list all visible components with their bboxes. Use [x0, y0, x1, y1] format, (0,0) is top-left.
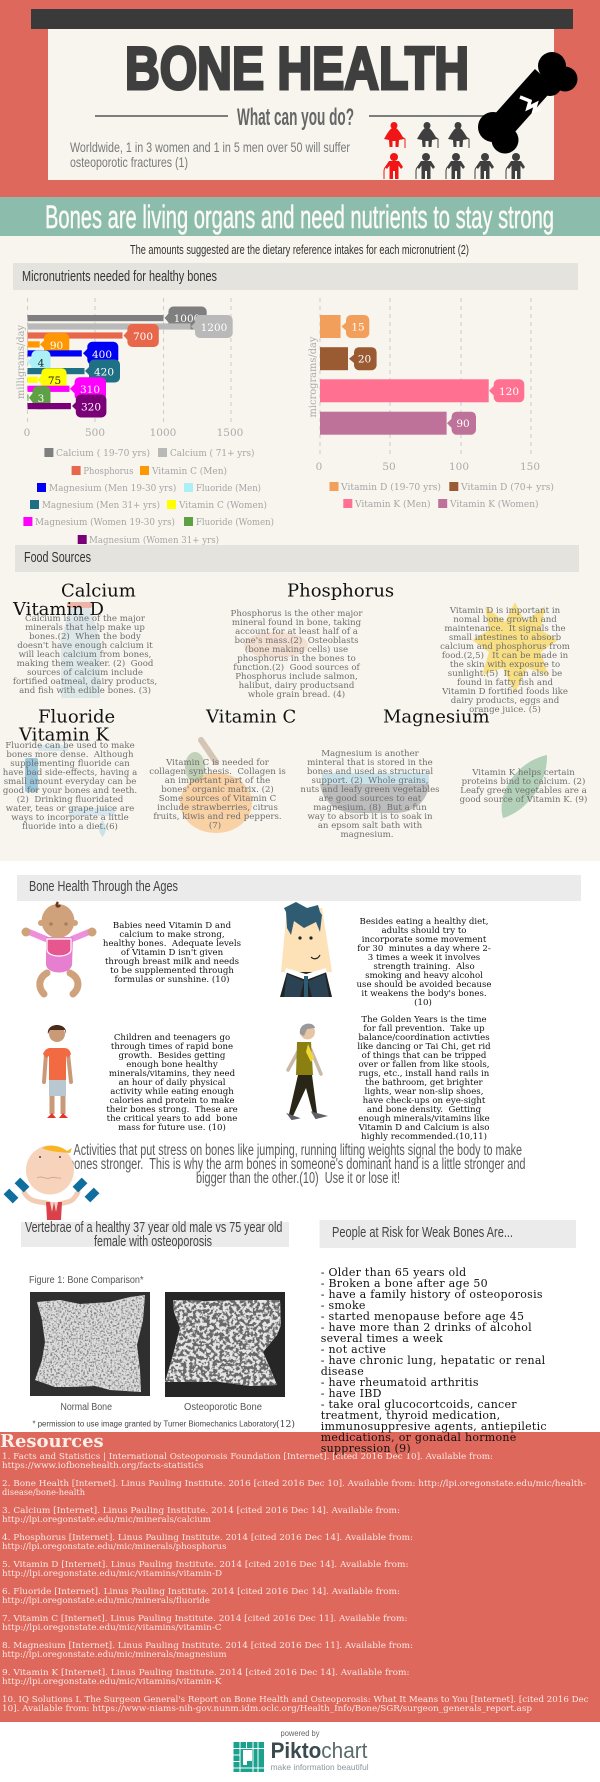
- axis ticks: 0: [316, 461, 322, 473]
- text: to be supplemented through: [110, 966, 234, 976]
- heading: people at risk: People at Risk for Weak Bones Are...: [332, 1224, 513, 1241]
- reference list: https://www.iofbonehealth.org/facts-statistics: [2, 1461, 203, 1471]
- risk factor list: - smoke: [321, 1299, 366, 1312]
- icon: fish: [244, 632, 308, 658]
- reference list: http://lpi.oregonstate.edu/mic/minerals/calcium: [2, 1515, 211, 1525]
- reference list: http://lpi.oregonstate.edu/mic/minerals/phosphorus: [2, 1542, 226, 1552]
- legend: Calcium ( 71+ yrs): [170, 448, 254, 459]
- axis ticks: [24, 427, 243, 439]
- risk factor list: - take oral glucocortcoids, cancer: [321, 1398, 517, 1411]
- panel: fluoride: [3, 707, 137, 837]
- text: the bathroom, get brighter: [365, 1078, 484, 1088]
- text: whole grain bread. (4): [248, 689, 345, 700]
- text: it weakens the body's bones.: [361, 989, 487, 999]
- text: small amount everyday can be: [4, 777, 136, 787]
- subtitle: What can you do?: [237, 104, 354, 131]
- risk factor list: treatment, thyroid medication,: [321, 1409, 500, 1422]
- text: doesn't have enough calcium it: [17, 641, 153, 651]
- risk factor list: [321, 1266, 547, 1455]
- axis title: milligrams/day: [16, 325, 27, 399]
- reference list: http://lpi.oregonstate.edu/mic/minerals/magnesium: [2, 1650, 226, 1660]
- icon: men: [384, 153, 525, 179]
- text: adults should try to: [382, 926, 466, 936]
- text: highly recommended.(10,11): [361, 1131, 487, 1142]
- text: magnesium. (8) But a fun: [313, 802, 427, 813]
- text: [356, 917, 492, 1008]
- heading: micronutrients: [13, 263, 578, 290]
- panel: resources: [0, 1431, 600, 1722]
- text: [106, 1033, 238, 1133]
- reference list: 8. Magnesium [Internet]. Linus Pauling Institute. 2014 [cited 2016 Dec 11]. Available from:: [2, 1641, 413, 1651]
- bar: calcium 71+: 1200: [201, 322, 227, 334]
- intro note: The amounts suggested are the dietary reference intakes for each micronutrient (2): [130, 243, 469, 257]
- footer: piktochart logo: [234, 1729, 369, 1772]
- reference list: http://lpi.oregonstate.edu/mic/vitamins/vitamin-C: [2, 1623, 222, 1633]
- axis ticks: 100: [449, 461, 469, 473]
- text: good source of Vitamin K. (9): [460, 794, 587, 805]
- text: phosphorus in the bones to: [237, 654, 356, 664]
- figure title: Figure 1: Bone Comparison*: [29, 1275, 144, 1286]
- text: rugs, etc., install hand rails in: [359, 1069, 490, 1079]
- text: minerals that help make up: [25, 623, 145, 633]
- text: found in fatty fish and: [457, 678, 554, 688]
- text: Some sources of Vitamin C: [159, 794, 277, 804]
- text: dairy products, eggs and: [451, 696, 560, 706]
- axis ticks: 1500: [217, 427, 243, 439]
- text: and bone density. Getting: [367, 1105, 482, 1115]
- icon: leaf: [502, 755, 547, 818]
- activity message: [68, 1142, 526, 1187]
- reference list: http://lpi.oregonstate.edu/mic/minerals/fluoride: [2, 1596, 210, 1606]
- heading: Magnesium: [383, 707, 490, 728]
- text: sources of calcium include: [27, 668, 143, 678]
- powered by: powered by: [280, 1729, 320, 1738]
- bar: vitamin K men: 120: [499, 386, 519, 398]
- text: an hour of daily physical: [118, 1078, 226, 1088]
- text: Vitamin K helps certain: [471, 768, 575, 778]
- text: bone's mass.(2) Osteoblasts: [234, 635, 359, 646]
- bar: vitamin C women: 75: [48, 375, 61, 387]
- panel: magnesium: [300, 707, 490, 840]
- bar: vitamin C men: [28, 333, 69, 356]
- reference list: 9. Vitamin K [Internet]. Linus Pauling Institute. 2014 [cited 2016 Dec 14]. Available from:: [2, 1668, 410, 1678]
- axis ticks: 500: [85, 427, 105, 439]
- text: an important part of the: [165, 776, 270, 786]
- icon: businessman: [280, 902, 332, 997]
- panel: babies: [22, 902, 241, 994]
- permission note: * permission to use image granted by Turner Biomechanics Laboratory: [32, 1420, 276, 1429]
- text: way to absorb it is to soak in: [307, 812, 433, 822]
- bar: vitamin D 19-70: 15: [351, 322, 365, 334]
- text: for fall prevention. Take up: [363, 1024, 485, 1034]
- reference list: 4. Phosphorus [Internet]. Linus Pauling Institute. 2014 [cited 2016 Dec 14]. Available from:: [2, 1533, 413, 1543]
- text: [3, 741, 137, 832]
- bar: magnesium men 19-30: 400: [92, 349, 112, 361]
- heading: bone health through the ages: Bone Health Through the Ages: [29, 878, 178, 895]
- legend: Calcium ( 19-70 yrs): [56, 448, 150, 459]
- fracture statistic: [70, 139, 350, 170]
- text: Calcium is one of the major: [25, 614, 146, 624]
- text: Magnesium is another: [321, 749, 420, 759]
- text: bones.(2) When the body: [29, 631, 141, 642]
- text: function.(2) Good sources of: [233, 662, 361, 673]
- tagline: make information beautiful: [271, 1762, 369, 1772]
- bar: magnesium men 19-30: [28, 342, 118, 365]
- text: Fluoride can be used to make: [5, 741, 135, 751]
- header panel: [31, 9, 578, 180]
- wordmark: Piktochart: [271, 1738, 367, 1763]
- bar: vitamin K women: [320, 412, 476, 435]
- legend: Magnesium (Men 31+ yrs): [42, 500, 160, 511]
- text: bones and used as structural: [307, 767, 433, 777]
- bar: magnesium men 31+: 420: [94, 366, 114, 378]
- heading: micronutrients: Micronutrients needed for healthy bones: [22, 268, 217, 285]
- text: supplementing fluoride can: [10, 759, 130, 769]
- text: Vitamin D fortified foods like: [441, 687, 568, 697]
- legend: Vitamin C (Men): [151, 466, 227, 477]
- heading: Calcium: [61, 581, 136, 602]
- risk factor list: disease: [321, 1365, 364, 1378]
- text: have bad side-effects, having a: [3, 768, 137, 778]
- heading: food sources: Food Sources: [24, 549, 91, 566]
- risk factor list: - Broken a bone after age 50: [321, 1277, 488, 1290]
- text: 3 times a week it involves: [368, 953, 480, 963]
- bar: calcium 71+: [28, 315, 233, 338]
- text: Babies need Vitamin D and: [113, 921, 232, 931]
- text: Phosphorus include salmon,: [235, 672, 358, 682]
- osteoporotic bone image: [165, 1292, 285, 1397]
- text: balance/coordination activties: [358, 1033, 490, 1043]
- text: (2) Drinking fluoridated: [17, 794, 124, 805]
- text: nuts and leafy green vegetables: [300, 785, 440, 795]
- chart: vitamins D and K, micrograms per day: [308, 298, 554, 510]
- text: mineral found in bone, taking: [232, 618, 362, 628]
- text: will leach calcium from bones,: [19, 650, 151, 660]
- panel: phosphorus: [231, 581, 394, 700]
- bar: fluoride men: [28, 350, 50, 374]
- text: sunlight.(5) It can also be: [448, 668, 562, 679]
- heading: food sources: [15, 545, 579, 572]
- icon: sun: [472, 602, 558, 693]
- heading: Vitamin K: [18, 725, 110, 746]
- risk factor list: - not active: [321, 1343, 386, 1356]
- fracture statistic: Worldwide, 1 in 3 women and 1 in 5 men over 50 will suffer: [70, 139, 350, 155]
- heading: Phosphorus: [287, 581, 394, 602]
- text: nomal bone growth and: [453, 615, 557, 625]
- text: through breast milk and needs: [105, 957, 239, 967]
- caption: normal: Normal Bone: [60, 1402, 112, 1413]
- risk factor list: medications, or gonadal hormone: [321, 1431, 516, 1444]
- axis ticks: 0: [24, 427, 30, 439]
- text: orange juice. (5): [469, 704, 541, 715]
- bar: vitamin K men: [320, 379, 524, 402]
- text: small intestines to absorb: [449, 633, 562, 643]
- reference list: 6. Fluoride [Internet]. Linus Pauling Institute. 2014 [cited 2016 Dec 14]. Available from:: [2, 1587, 400, 1597]
- bar: magnesium women 31+: 320: [81, 402, 101, 414]
- text: good for your bones and teeth.: [3, 786, 137, 796]
- legend: Vitamin K (Men): [354, 499, 430, 510]
- panel: golden years: [288, 1015, 491, 1142]
- bar: vitamin D 70+: [320, 347, 377, 370]
- heading: vertebrae comparison: Vertebrae of a healthy 37 year old male vs 75 year old: [25, 1219, 282, 1236]
- text: calories and protein to make: [109, 1096, 235, 1106]
- reference list: 10. IQ Solutions I. The Surgeon General's Report on Bone Health and Osteoporosis: What It Means to You [Internet]. [cited 2016 Dec: [2, 1695, 589, 1705]
- reference list: 1. Facts and Statistics | International Osteoporosis Foundation [Internet]. [cited 2016 Dec 10]. Available from:: [2, 1452, 493, 1462]
- heading: Fluoride: [38, 707, 115, 728]
- text: smoking and heavy alcohol: [365, 971, 483, 981]
- risk factor list: - have a family history of osteoporosis: [321, 1288, 543, 1301]
- text: of things that can be tripped: [362, 1051, 487, 1061]
- icon: tap and water: [25, 745, 115, 837]
- text: (bone making cells) use: [245, 644, 348, 655]
- reference list: disease/bone-health: [2, 1488, 85, 1498]
- text: minteral that is stored in the: [307, 758, 433, 768]
- axis ticks: 150: [520, 461, 540, 473]
- legend: Magnesium (Women 31+ yrs): [89, 535, 219, 546]
- text: healthy bones. Adequate levels: [103, 939, 241, 949]
- text: the critical years to add bone: [107, 1114, 237, 1124]
- risk factor list: - have chronic lung, hepatatic or renal: [321, 1354, 546, 1367]
- heading: people at risk: [320, 1220, 576, 1248]
- icon: broken bone: [478, 52, 578, 154]
- axis ticks: 50: [382, 461, 396, 473]
- text: bones' organic matrix. (2): [161, 784, 274, 795]
- axis title: micrograms/day: [308, 336, 319, 418]
- risk factor list: - have more than 2 drinks of alcohol: [321, 1321, 532, 1334]
- text: formulas or sunshine. (10): [114, 974, 230, 985]
- subtitle rule right: [369, 115, 499, 117]
- normal bone image: [30, 1292, 150, 1396]
- text: water, teas or grape juice are: [6, 804, 134, 814]
- legend: Vitamin D (19-70 yrs): [340, 482, 441, 493]
- icon: baby: [22, 902, 96, 994]
- text: their bones strong. These are: [106, 1105, 238, 1115]
- risk factor list: - have IBD: [321, 1387, 382, 1400]
- text: bones more dense. Although: [6, 750, 134, 760]
- bar: magnesium women 31+: [28, 394, 106, 418]
- text: maintenance. It signals the: [444, 624, 566, 634]
- bar: magnesium women 19-30: 310: [80, 384, 100, 396]
- icon: bowl: [320, 773, 429, 813]
- text: food.(2,5) It can be made in: [442, 650, 569, 661]
- heading: vertebrae comparison: [21, 1219, 289, 1250]
- text: proteins bind to calcium. (2): [462, 776, 585, 787]
- risk factor list: - Older than 65 years old: [321, 1266, 467, 1279]
- legend: Vitamin C (Women): [178, 500, 267, 511]
- logo mark: [234, 1742, 264, 1772]
- text: halibut, dairy productsand: [239, 681, 355, 691]
- risk factor list: - have rheumatoid arthritis: [321, 1376, 479, 1389]
- text: making them weaker. (2) Good: [17, 658, 154, 669]
- risk factor list: suppression (9): [321, 1442, 411, 1455]
- text: over or fallen from like stools,: [358, 1060, 490, 1070]
- text: (10): [414, 997, 432, 1008]
- text: incorporate some movement: [362, 935, 487, 945]
- text: activity while eating enough: [110, 1087, 234, 1097]
- page backgrounds: [0, 0, 600, 861]
- risk factor list: - started menopause before age 45: [321, 1310, 524, 1323]
- bar: phosphorus: 700: [133, 331, 153, 343]
- text: Vitamin C is needed for: [165, 758, 270, 768]
- text: an epsom salt bath with: [318, 821, 423, 831]
- axis ticks: 1000: [150, 427, 176, 439]
- legend: Vitamin D (70+ yrs): [460, 482, 554, 493]
- panel: children: [43, 1025, 238, 1133]
- risk factor list: several times a week: [321, 1332, 443, 1345]
- text: Children and teenagers go: [114, 1033, 230, 1043]
- icon: orange: [180, 740, 252, 833]
- heading: Resources: [0, 1431, 104, 1452]
- legend: Phosphorus: [83, 467, 134, 477]
- text: fluoride into a diet.(6): [22, 821, 118, 832]
- reference list: 3. Calcium [Internet]. Linus Pauling Institute. 2014 [cited 2016 Dec 14]. Available from:: [2, 1506, 400, 1516]
- reference list: http://lpi.oregonstate.edu/mic/vitamins/vitamin-D: [2, 1569, 222, 1579]
- text: of Vitamin D isn't given: [121, 948, 224, 958]
- text: and fish with edible bones. (3): [19, 685, 151, 696]
- panel: calcium: [13, 581, 157, 698]
- bar: fluoride men: 4: [38, 358, 45, 370]
- text: enough bone healthy: [126, 1060, 218, 1070]
- text: mass for future use. (10): [118, 1122, 226, 1133]
- reference list: 5. Vitamin D [Internet]. Linus Pauling Institute. 2014 [cited 2016 Dec 14]. Available from:: [2, 1560, 409, 1570]
- panel: vitamin K: [18, 725, 587, 818]
- bar: magnesium women 19-30: [28, 377, 106, 400]
- risk factor list: immunosuppresive agents, antiepiletic: [321, 1420, 547, 1433]
- axis ticks: [316, 461, 540, 473]
- text: [231, 609, 363, 700]
- bar: magnesium men 31+: [28, 360, 120, 382]
- bar: vitamin D 70+: 20: [358, 354, 371, 366]
- text: support. (2) Whole grains,: [311, 775, 429, 786]
- text: through times of rapid bone: [111, 1042, 233, 1052]
- title: BONE HEALTH: [125, 35, 469, 102]
- subtitle rule left: [95, 115, 228, 117]
- text: Leafy green vegetables are a: [460, 786, 587, 796]
- permission note: (12): [276, 1419, 295, 1430]
- icon: milk bottle: [61, 602, 100, 698]
- text: [103, 921, 241, 985]
- text: are good sources to eat: [319, 794, 422, 804]
- figure: bone comparison: [29, 1275, 295, 1430]
- icon: senior: [288, 1024, 324, 1119]
- legend: Fluoride (Women): [196, 517, 274, 528]
- text: minerals/vitamins, they need: [109, 1069, 236, 1079]
- text: Besides eating a healthy diet,: [360, 917, 488, 927]
- text: Vitamin D is important in: [449, 606, 561, 616]
- legend: [23, 448, 274, 546]
- text: [357, 1015, 491, 1142]
- caption: osteoporotic: Osteoporotic Bone: [184, 1402, 262, 1413]
- text: collagen synthesis. Collagen is: [149, 767, 286, 777]
- bar: calcium 19-70: [28, 306, 207, 330]
- text: enough minerals/vitamins like: [358, 1114, 490, 1124]
- chart: minerals and vitamin C, milligrams per day: [16, 298, 274, 546]
- reference list: 2. Bone Health [Internet]. Linus Pauling Institute. 2016 [cited 2016 Dec 10]. Available from: http://lpi.oregonstate.edu/mic/health-: [2, 1479, 586, 1489]
- reference list: 10]. Available from: https://www-niams-nih-gov.nunm.idm.oclc.org/Health_Info/Bone/SGR/surgeon_generals_report.asp: [2, 1704, 532, 1714]
- text: Phosphorus is the other major: [231, 609, 363, 619]
- text: (7): [209, 820, 221, 831]
- legend: Magnesium (Women 19-30 yrs): [35, 517, 175, 528]
- bar: vitamin D 19-70: [320, 315, 369, 338]
- legend: Magnesium (Men 19-30 yrs): [49, 483, 176, 494]
- text: [460, 768, 587, 805]
- text: fruits, kiwis and red peppers.: [153, 812, 282, 822]
- bar: vitamin K women: 90: [456, 418, 470, 430]
- bar: vitamin C men: 90: [50, 340, 63, 352]
- text: magnesium.: [341, 830, 393, 840]
- legend: Fluoride (Men): [196, 483, 261, 494]
- legend: [330, 482, 554, 510]
- reference list: http://lpi.oregonstate.edu/mic/vitamins/vitamin-K: [2, 1677, 222, 1687]
- heading: vertebrae comparison: female with osteoporosis: [94, 1233, 212, 1250]
- text: use should be avoided because: [356, 980, 492, 990]
- icon: women: [384, 122, 469, 148]
- fracture statistic: osteoporotic fractures (1): [70, 154, 188, 170]
- reference list: 7. Vitamin C [Internet]. Linus Pauling Institute. 2014 [cited 2016 Dec 11]. Available from:: [2, 1614, 408, 1624]
- text: ways to incorporate a little: [11, 813, 129, 823]
- text: Vitamin D and Calcium is also: [358, 1123, 489, 1133]
- bar: fluoride women: 3: [38, 393, 44, 405]
- bar: fluoride women: [28, 386, 50, 409]
- text: like dancing or Tai Chi, get rid: [357, 1042, 491, 1052]
- heading: bone health through the ages: [17, 875, 581, 901]
- text: account for at least half of a: [235, 627, 358, 637]
- text: [300, 749, 440, 840]
- panel: adults: [280, 902, 492, 1008]
- text: the skin with exposure to: [450, 660, 560, 670]
- legend: Vitamin K (Women): [449, 499, 538, 510]
- activity message: bigger than the other.(10) Use it or lose it!: [196, 1170, 400, 1187]
- text: include strawberries, citrus: [157, 803, 278, 813]
- text: calcium and phosphorus from: [440, 642, 570, 652]
- text: The Golden Years is the time: [361, 1015, 487, 1025]
- bar: calcium 19-70: 1000: [174, 313, 200, 325]
- bar: phosphorus: [28, 324, 159, 347]
- heading: Vitamin C: [205, 707, 296, 728]
- reference list: [2, 1452, 589, 1714]
- icon: child: [43, 1025, 71, 1118]
- text: growth. Besides getting: [119, 1051, 226, 1061]
- text: strength training. Also: [373, 962, 475, 972]
- text: [149, 758, 286, 831]
- text: have check-ups on eye-sight: [363, 1096, 486, 1106]
- bar: vitamin C women: [28, 368, 67, 391]
- text: for 30 minutes a day where 2-: [357, 944, 491, 954]
- text: [440, 606, 570, 715]
- panel: vitamin D: [12, 599, 570, 715]
- text: fortified oatmeal, dairy products,: [13, 677, 157, 687]
- text: calcium to make strong,: [119, 930, 225, 940]
- text: [13, 614, 157, 696]
- panel: vitamin C: [149, 707, 296, 833]
- icon: weightlifter: [4, 1146, 99, 1220]
- text: lights, wear non-slip shoes,: [365, 1087, 483, 1097]
- heading: Vitamin D: [12, 599, 104, 620]
